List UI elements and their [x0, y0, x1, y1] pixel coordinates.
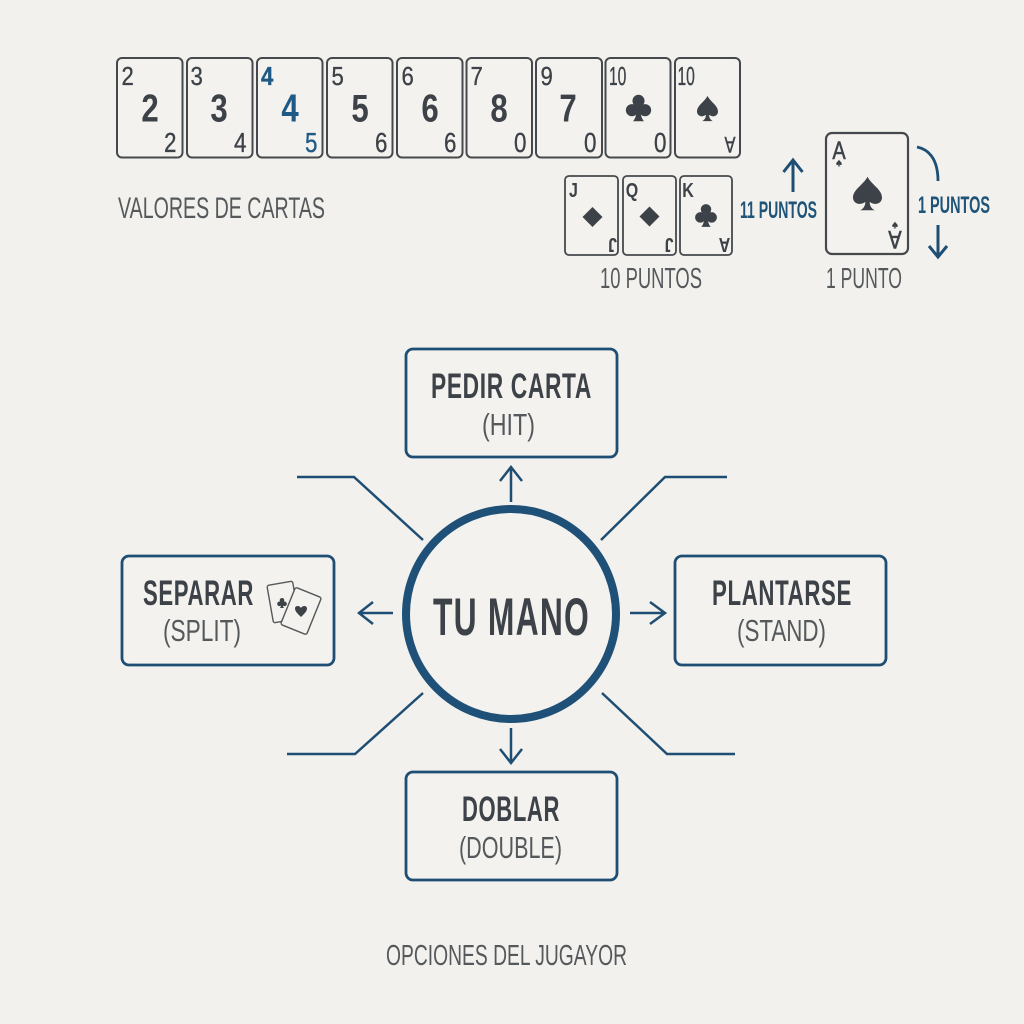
card: 2: 2 [164, 128, 176, 159]
card: Q: J [665, 234, 673, 256]
card: 4 blue: 4 [281, 87, 299, 130]
card: 9 and 7: 7 [559, 87, 577, 130]
card: 6: 6 [444, 128, 456, 159]
card: 5: 5 [351, 87, 369, 130]
card: 9 and 7: 9 [540, 62, 553, 91]
card: 7 and 8 [466, 58, 532, 159]
card: 2: 2 [141, 87, 159, 130]
option: hit: (HIT) [482, 407, 535, 442]
card: 10 of clubs: 10 [609, 62, 626, 91]
card: 3: 4 [234, 128, 246, 159]
option: double [406, 772, 617, 880]
icon: club [626, 95, 651, 121]
option: hit: PEDIR CARTA [431, 367, 592, 406]
option: split: SEPARAR [143, 574, 254, 613]
arrow: to double [500, 728, 522, 763]
card: 5 [327, 58, 392, 159]
arrow: down from 1 point [929, 225, 947, 257]
arrow: up to 11 points [784, 160, 802, 192]
card: 7 and 8: 8 [490, 87, 508, 130]
card: K: A [719, 234, 730, 256]
card: K [680, 176, 732, 256]
option: stand: PLANTARSE [712, 574, 852, 613]
arrow: to hit [500, 467, 522, 502]
label: 1 point: 1 PUNTO [826, 263, 902, 295]
option: double: (DOUBLE) [459, 830, 562, 865]
arrow: curve to 1 point [917, 147, 938, 181]
card: 3: 3 [190, 62, 203, 91]
connector: lower right [602, 693, 735, 754]
hub: your hand [406, 509, 616, 719]
heading: card values: VALORES DE CARTAS [118, 192, 325, 225]
label: 10 points: 10 PUNTOS [600, 263, 702, 295]
option: split [122, 556, 334, 665]
card: 3 [187, 58, 252, 159]
connector: upper right [601, 477, 727, 540]
card: Q: Q [626, 179, 638, 201]
connector: lower left [287, 693, 423, 754]
card: 10 of clubs [606, 58, 670, 159]
card: 9 and 7: 0 [584, 128, 596, 159]
card: J: J [608, 234, 617, 256]
card: 4 blue: 5 [305, 128, 317, 159]
card: J: J [569, 179, 578, 201]
card: ace of spades [826, 133, 908, 254]
card: K: K [682, 179, 694, 201]
card: 7 and 8: 0 [514, 128, 526, 159]
card: ace of spades: A [832, 137, 846, 165]
label: 11 points: 11 PUNTOS [740, 197, 817, 224]
option: split: (SPLIT) [163, 613, 241, 648]
card: 2 [117, 58, 182, 159]
option: stand [675, 556, 886, 665]
connector: upper left [297, 477, 423, 540]
card: J [565, 176, 618, 256]
hub: your hand: TU MANO [433, 588, 590, 647]
card: 6: 6 [402, 62, 414, 91]
card: 2: 2 [122, 62, 134, 91]
arrow: to stand [630, 602, 665, 624]
card: 6: 6 [421, 87, 439, 130]
panel: face cards [565, 176, 732, 256]
card: Q [623, 176, 676, 256]
panel: number cards row [117, 58, 740, 159]
card: 10 of clubs: 0 [654, 128, 666, 159]
card: 10 of spades: 10 [678, 62, 695, 91]
card: 4 blue: 4 [261, 62, 274, 91]
card: 7 and 8: 7 [470, 62, 483, 91]
card: ace of spades: A [888, 225, 902, 253]
option: hit [406, 349, 617, 457]
card: 10 of spades [675, 58, 740, 158]
caption: player options: OPCIONES DEL JUGAYOR [386, 940, 627, 972]
card: 5: 5 [332, 62, 344, 91]
option: stand: (STAND) [737, 613, 826, 648]
option: double: DOBLAR [462, 790, 560, 829]
card: 9 and 7 [536, 58, 602, 159]
icon: spade [697, 96, 718, 121]
icon: two cards [267, 581, 321, 635]
arrow: to split [359, 602, 393, 624]
card: 3: 3 [210, 87, 228, 130]
card: 4 blue [257, 58, 322, 159]
card: 6 [397, 58, 462, 159]
card: 5: 6 [375, 128, 387, 159]
card: 10 of spades: A [724, 131, 736, 156]
